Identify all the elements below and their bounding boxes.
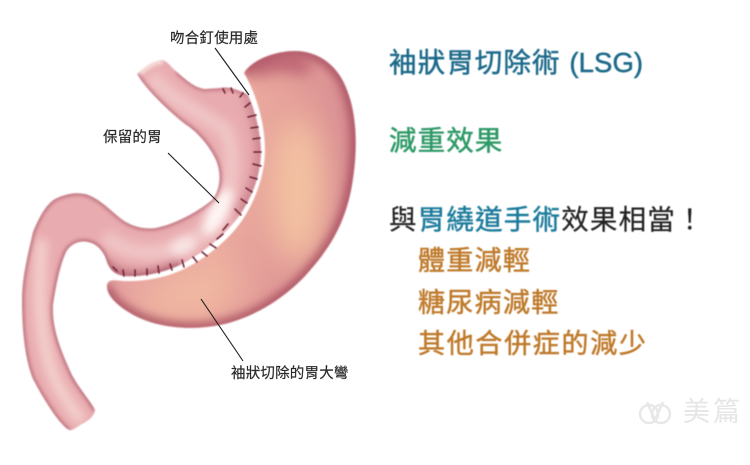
label: removed greater curvature: 袖狀切除的胃大彎: [231, 365, 349, 382]
callout line: preserved stomach: [168, 153, 219, 203]
heading: weight loss effect: 減重效果: [389, 125, 503, 156]
label: staple site: 吻合釘使用處: [170, 30, 258, 47]
list item: diabetes reduction: 糖尿病減輕: [418, 288, 560, 318]
icon: watermark logo: [640, 402, 670, 423]
watermark text: 美篇: [683, 397, 743, 427]
callout line: removed greater curvature: [201, 299, 243, 361]
label: preserved stomach: 保留的胃: [103, 129, 162, 146]
staple line: [113, 88, 261, 276]
list item: other comorbidities reduced: 其他合併症的減少: [418, 329, 648, 359]
statement: comparable to gastric bypass: 與胃繞道手術效果相當！: [389, 204, 705, 235]
callout line: staple site: [215, 48, 249, 95]
title: 袖狀胃切除術 (LSG): [389, 47, 643, 78]
remaining sleeve stomach with esophagus and duodenum: [15, 50, 270, 440]
removed greater curvature of stomach: [100, 45, 365, 335]
illustration: stomach: [15, 45, 365, 440]
list item: weight reduction: 體重減輕: [418, 246, 531, 276]
